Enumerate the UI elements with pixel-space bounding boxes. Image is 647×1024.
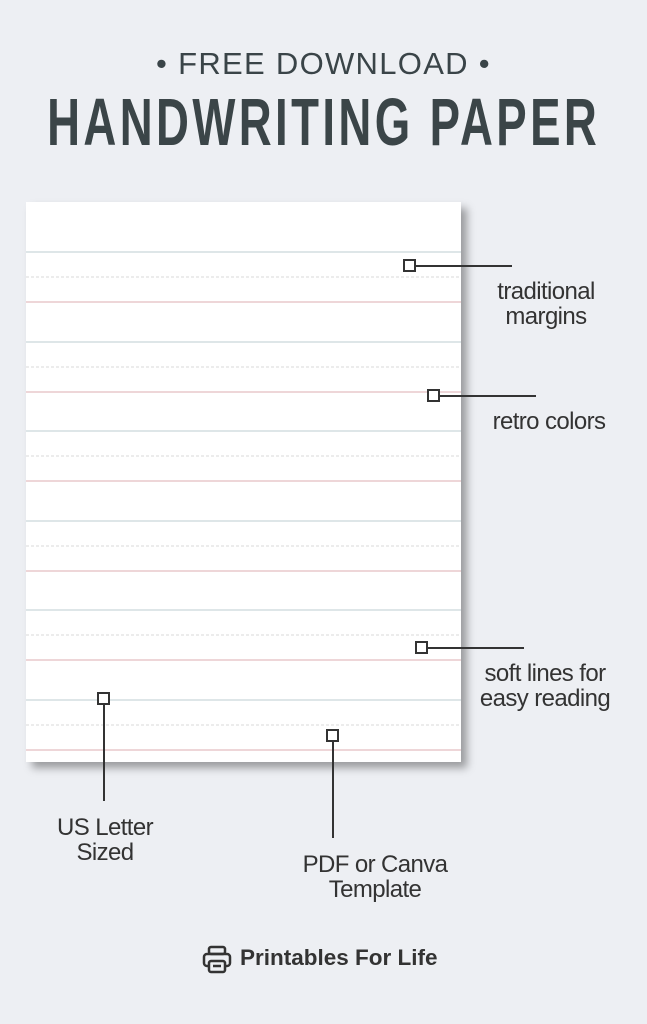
callout: US Letter [57, 692, 154, 866]
callout: PDF or Canva: PDF or Canva [303, 851, 447, 878]
callout: PDF or Canva: Template [329, 876, 421, 903]
callout: traditional margins: traditional [497, 278, 595, 305]
paper [26, 202, 461, 762]
brand footer: Printables For Life [240, 945, 438, 970]
callout: traditional margins: margins [505, 303, 587, 330]
callout: soft lines [415, 641, 610, 712]
callout: PDF or Canva [303, 729, 448, 903]
callout: soft lines: easy reading [480, 685, 610, 712]
subtitle: • FREE DOWNLOAD • [156, 46, 491, 81]
callout: US Letter: US Letter [57, 814, 153, 841]
callout: retro colors: retro colors [493, 408, 605, 435]
callout: traditional margins [403, 259, 595, 330]
callout: US Letter: Sized [76, 839, 134, 866]
callout: retro colors [427, 389, 606, 435]
title: HANDWRITING PAPER [47, 85, 600, 160]
callout: soft lines: soft lines for [484, 660, 606, 687]
icon: printer [202, 946, 232, 974]
